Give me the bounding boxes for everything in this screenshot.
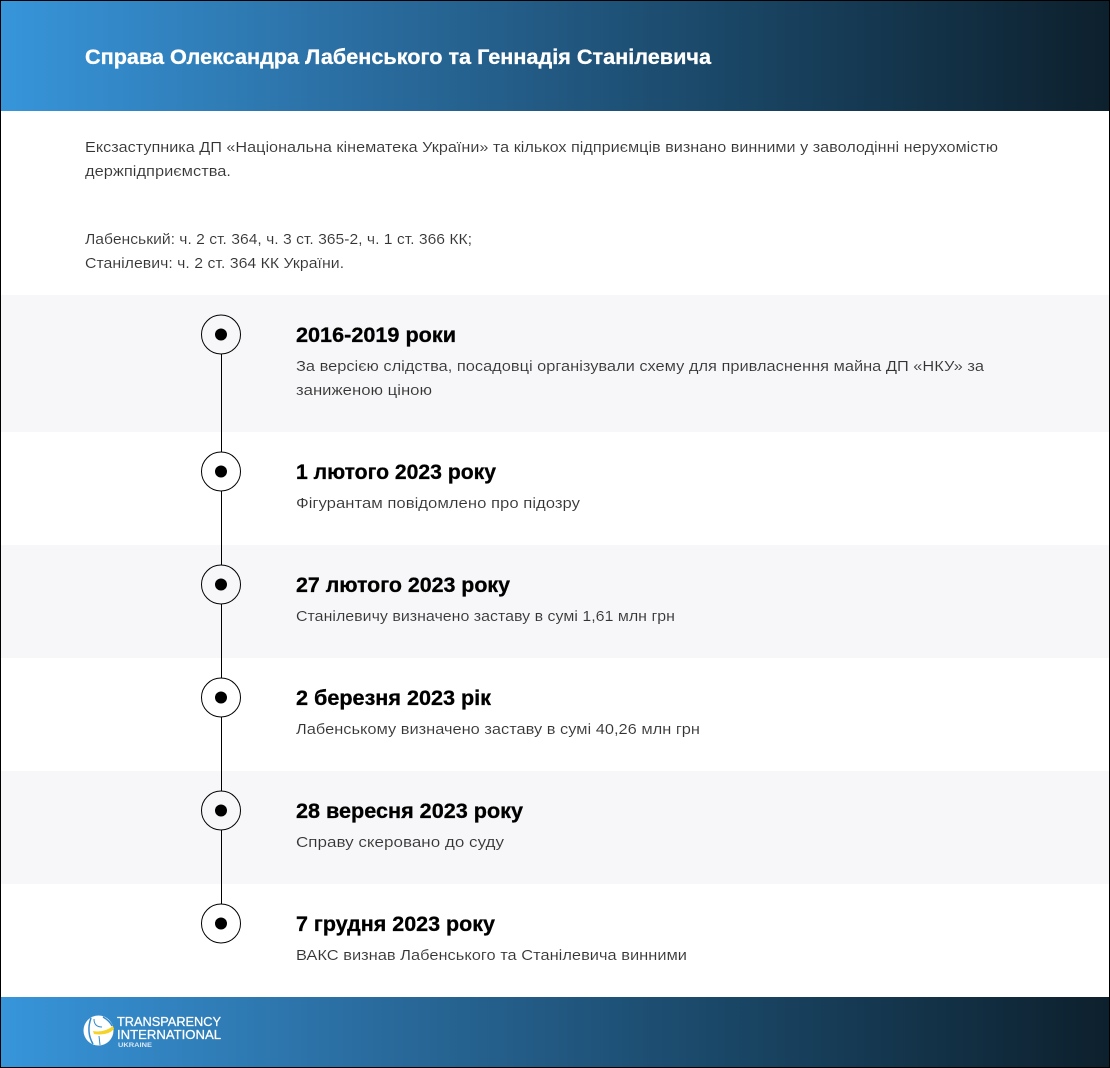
legal articles text block: Лабенський: ч. 2 ст. 364, ч. 3 ст. 365-2, ч. 1 ст. 366 КК; [85,231,472,248]
intro text block: Ексзаступника ДП «Національна кінематека України» та кількох підприємців визнано винними у заволодінні нерухомістю [85,139,998,156]
timeline event: 7 грудня 2023 [202,904,687,964]
logo: Transparency International Ukraine: TRANSPARENCY [117,1015,222,1029]
timeline event: 27 лютого 2023: Станілевичу визначено заставу в сумі 1,61 млн грн [296,608,675,625]
timeline event: 7 грудня 2023: ВАКС визнав Лабенського та Станілевича винними [296,947,687,964]
timeline event: 28 вересня 2023: 28 вересня 2023 року [296,800,523,823]
logo: Transparency International Ukraine: INTERNATIONAL [117,1028,221,1042]
timeline event: 7 грудня 2023: 7 грудня 2023 року [296,913,495,936]
timeline line [220,334,222,923]
intro text block: держпідприємства. [85,163,231,180]
intro text block [85,139,998,180]
timeline event: 1 лютого 2023: 1 лютого 2023 року [296,461,496,484]
logo: Transparency International Ukraine: UKRAINE [118,1042,153,1049]
timeline event: 28 вересня 2023 [202,791,523,851]
timeline event: 2016-2019: За версією слідства, посадовці організували схему для привласнення майна ДП «НКУ» за [296,358,985,375]
legal articles text block [85,231,472,272]
timeline event: 2 березня 2023: 2 березня 2023 рік [296,687,491,710]
timeline event: 27 лютого 2023: 27 лютого 2023 року [296,574,510,597]
row backgrounds [1,295,1109,884]
title: Справа Олександра Лабенського та Геннадія Станілевича [85,45,712,69]
timeline event: 2 березня 2023 [202,678,700,738]
footer band [1,997,1109,1067]
legal articles text block: Станілевич: ч. 2 ст. 364 КК України. [85,255,344,272]
timeline event: 28 вересня 2023: Справу скеровано до суду [296,834,505,851]
timeline event: 1 лютого 2023 [202,452,581,512]
header band [1,1,1109,111]
timeline event: 2016-2019: заниженою ціною [296,382,432,399]
timeline event: 1 лютого 2023: Фігурантам повідомлено про підозру [296,495,581,512]
timeline event: 2 березня 2023: Лабенському визначено заставу в сумі 40,26 млн грн [296,721,700,738]
timeline event: 2016-2019 [202,315,985,399]
timeline event: 2016-2019: 2016-2019 роки [296,324,456,347]
timeline event: 27 лютого 2023 [202,565,675,625]
logo: Transparency International Ukraine [84,1015,222,1049]
